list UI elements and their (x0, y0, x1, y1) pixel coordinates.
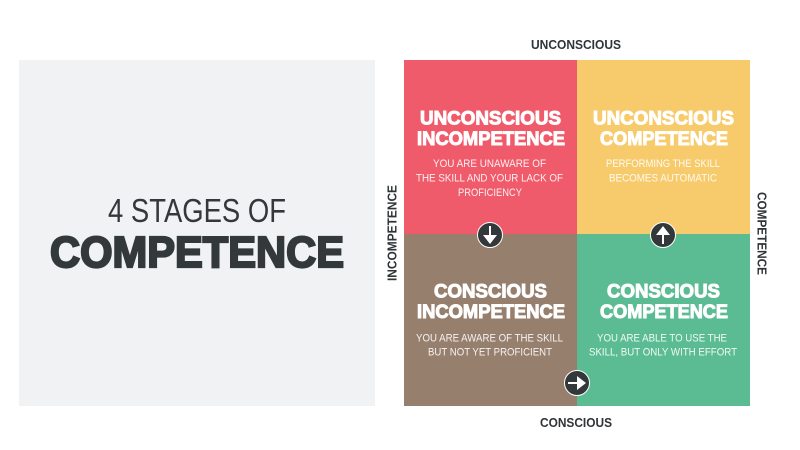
axis label: competence: COMPETENCE (754, 192, 768, 275)
heading: conscious incompetence: INCOMPETENCE (417, 302, 565, 323)
heading: unconscious competence: COMPETENCE (600, 129, 728, 150)
description: unconscious incompetence: PROFICIENCY (458, 187, 522, 199)
heading: conscious incompetence: CONSCIOUS (434, 282, 547, 302)
icon: right arrow (564, 370, 590, 396)
heading: conscious incompetence (417, 282, 565, 323)
description: conscious incompetence (416, 332, 563, 358)
description: unconscious incompetence: YOU ARE UNAWARE OF (433, 158, 546, 170)
icon: down arrow (478, 222, 502, 248)
heading: unconscious incompetence: INCOMPETENCE (417, 129, 565, 150)
description: conscious competence: YOU ARE ABLE TO USE THE (597, 332, 727, 344)
title line: 4 stages of: 4 STAGES OF (108, 192, 286, 229)
title line: competence: COMPETENCE (50, 228, 344, 277)
heading: conscious competence: COMPETENCE (600, 302, 728, 323)
heading: conscious competence (600, 282, 728, 323)
description: unconscious competence (606, 158, 720, 184)
heading: unconscious competence: UNCONSCIOUS (593, 108, 734, 130)
quadrant: unconscious incompetence (404, 60, 577, 234)
heading: conscious competence: CONSCIOUS (607, 282, 720, 302)
heading: unconscious incompetence (417, 108, 565, 150)
description: conscious competence: SKILL, BUT ONLY WITH EFFORT (589, 346, 737, 358)
quadrant: conscious competence (577, 234, 750, 406)
description: unconscious incompetence: THE SKILL AND YOUR LACK OF (416, 172, 563, 184)
description: unconscious competence: BECOMES AUTOMATIC (609, 172, 717, 184)
icon: up arrow (650, 222, 676, 248)
quadrant: unconscious competence (577, 60, 750, 234)
quadrant: conscious incompetence (404, 234, 577, 406)
axis label: unconscious: UNCONSCIOUS (531, 38, 621, 52)
heading: unconscious competence (593, 108, 734, 150)
description: conscious competence (589, 332, 737, 358)
axis label: conscious: CONSCIOUS (540, 416, 612, 430)
description: unconscious incompetence (416, 158, 563, 199)
panel: title background (19, 60, 375, 406)
axis label: incompetence: INCOMPETENCE (386, 185, 400, 281)
heading: unconscious incompetence: UNCONSCIOUS (420, 108, 561, 130)
description: conscious incompetence: YOU ARE AWARE OF THE SKILL (416, 332, 563, 344)
description: unconscious competence: PERFORMING THE SKILL (606, 158, 720, 170)
description: conscious incompetence: BUT NOT YET PROFICIENT (428, 346, 552, 358)
